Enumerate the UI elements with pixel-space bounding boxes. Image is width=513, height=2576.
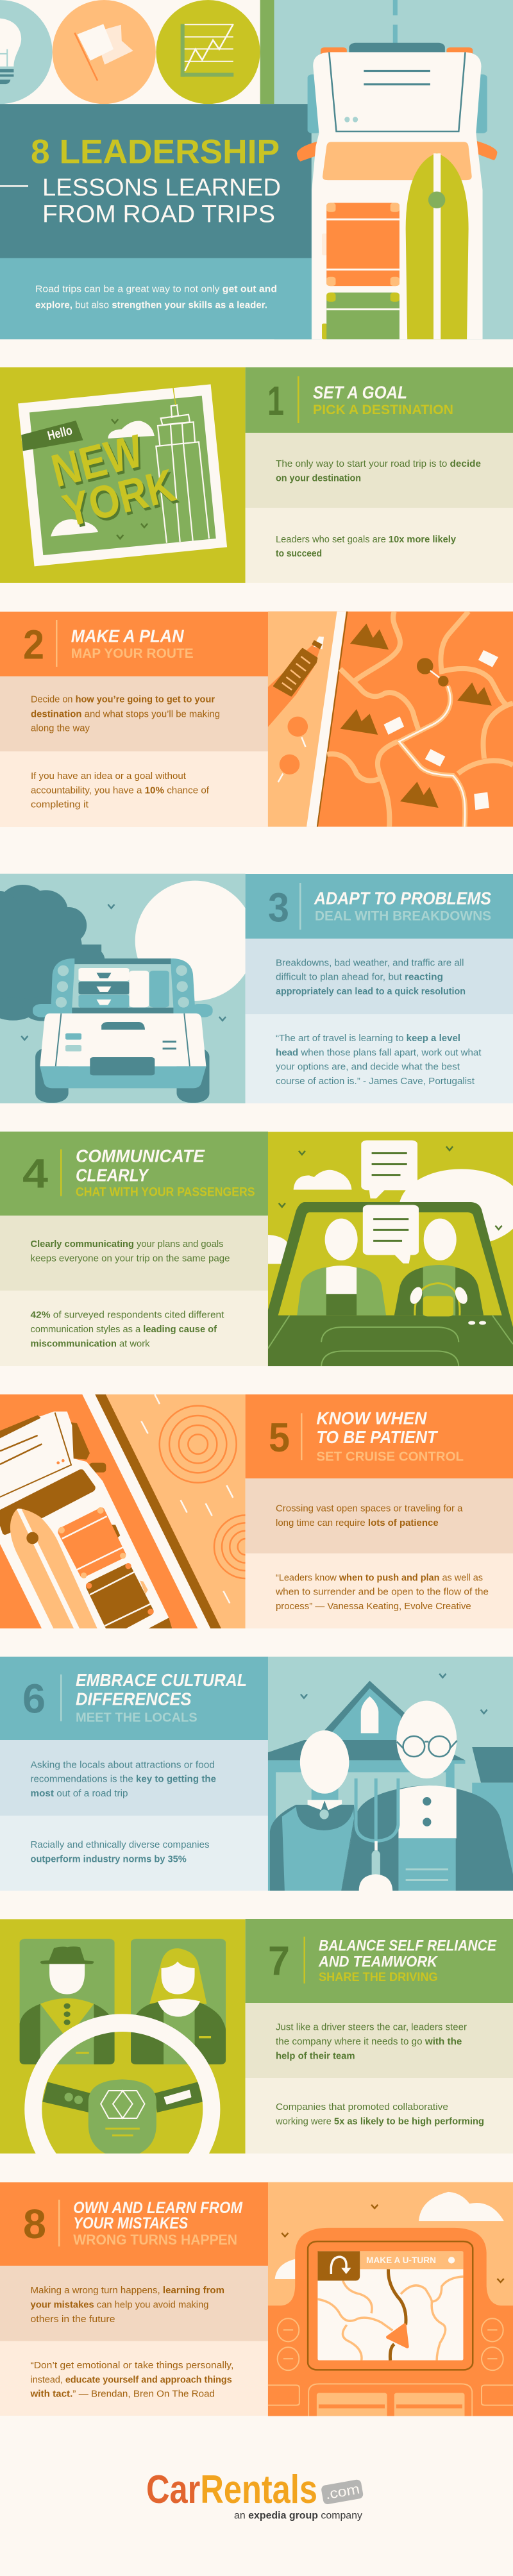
- header 2: 2: [23, 621, 44, 667]
- text block 4a: [0, 1216, 268, 1291]
- illustration: two people in a car: [268, 1132, 513, 1366]
- woman portrait: [131, 1939, 226, 2064]
- text block 5a: [246, 1478, 513, 1553]
- text block 4a: keeps everyone on your trip on the same page: [31, 1253, 230, 1264]
- title: LESSONS LEARNED: [42, 174, 281, 201]
- illustration: van seen from above: [297, 43, 498, 339]
- header 5: KNOW WHEN: [316, 1409, 427, 1428]
- panel: section 8 own and learn from your mistakes: [0, 2182, 513, 2418]
- text block 3b: course of action is.” - James Cave, Portugalist: [276, 1076, 475, 1087]
- text block 4b: 42% of surveyed respondents cited different: [31, 1310, 224, 1321]
- header 2: MAKE A PLAN: [71, 626, 185, 646]
- text block 3a: appropriately can lead to a quick resolution: [276, 986, 466, 997]
- farmhouse: [268, 1681, 513, 1891]
- panel: section 6 embrace cultural differences: [0, 1657, 513, 1891]
- text block 2b: accountability, you have a 10% chance of: [31, 785, 210, 796]
- illustration: New York postcard: NEW: [47, 425, 148, 498]
- text block 6a: Asking the locals about attractions or food: [31, 1759, 215, 1770]
- text block 6a: recommendations is the key to getting the: [31, 1774, 216, 1785]
- header 4: [0, 1132, 268, 1216]
- GPS instruction label: MAKE A U-TURN: [366, 2255, 436, 2265]
- text block 8b: instead, educate yourself and approach things: [31, 2374, 232, 2385]
- text block 7a: help of their team: [276, 2050, 355, 2061]
- text block 8a: [0, 2266, 268, 2341]
- header 6: MEET THE LOCALS: [76, 1710, 198, 1725]
- text block 2a: Decide on how you’re going to get to your: [31, 694, 215, 705]
- map roads: [327, 612, 513, 827]
- logo: CarRentals.com: an expedia group company: [234, 2511, 362, 2522]
- speech bubbles: [361, 1141, 419, 1264]
- pitchfork: [356, 1778, 398, 1891]
- header 3: ADAPT TO PROBLEMS: [314, 889, 492, 908]
- text block 2a: along the way: [31, 723, 90, 734]
- text block 1a: The only way to start your road trip is to decide: [276, 458, 481, 469]
- panel: section 2 make a plan: [0, 612, 513, 827]
- tree: [0, 885, 105, 1021]
- illustration: van driving on road: [0, 1394, 246, 1628]
- text block 3b: head when those plans fall apart, work out what: [276, 1047, 482, 1058]
- text block 7b: Companies that promoted collaborative: [276, 2102, 448, 2112]
- header 8: YOUR MISTAKES: [73, 2214, 189, 2232]
- panel: hero illustration: [0, 0, 513, 339]
- header 6: [0, 1657, 268, 1740]
- logo: CarRentals.com: .com: [324, 2480, 361, 2502]
- header 4: CLEARLY: [76, 1165, 149, 1185]
- text block 5b: [246, 1553, 513, 1628]
- text block 2a: [0, 676, 268, 751]
- text block 3a: [246, 939, 513, 1014]
- logo: CarRentals.com: CarRentals: [146, 2468, 317, 2512]
- text block 3b: [246, 1014, 513, 1103]
- header 1: 1: [267, 378, 284, 424]
- illustration: map and pen: [268, 612, 513, 827]
- illustration: New York postcard: YORK: [60, 462, 183, 540]
- passenger: [297, 1219, 386, 1316]
- illustration: GPS navigation screen: [268, 2182, 513, 2418]
- text block 8a: your mistakes can help you avoid making: [31, 2299, 209, 2310]
- title: [31, 133, 281, 228]
- van body: [0, 1412, 172, 1628]
- text block 4a: Clearly communicating your plans and goals: [31, 1239, 223, 1250]
- title panel background: [0, 104, 312, 339]
- text block 8b: “Don’t get emotional or take things personally,: [31, 2360, 233, 2371]
- text block 2b: [0, 751, 268, 827]
- header 1: [246, 367, 513, 433]
- header 3: DEAL WITH BREAKDOWNS: [315, 908, 491, 923]
- title: FROM ROAD TRIPS: [42, 201, 275, 228]
- intro text: Road trips can be a great way to not only get out and: [35, 283, 277, 294]
- text block 8a: Making a wrong turn happens, learning from: [31, 2285, 224, 2296]
- suitcase: orange: [322, 233, 327, 255]
- intro text: explore, but also strengthen your skills as a leader.: [35, 299, 267, 310]
- text block 2a: destination and what stops you’ll be making: [31, 708, 220, 719]
- illustration: New York postcard: [0, 367, 246, 583]
- header 5: [246, 1394, 513, 1478]
- illustration: New York postcard: NEW: [49, 428, 150, 500]
- intro text: [35, 283, 277, 310]
- suitcase: green: [322, 324, 327, 339]
- text block 8a: others in the future: [31, 2314, 115, 2325]
- text block 3a: Breakdowns, bad weather, and traffic are all: [276, 957, 464, 968]
- illustration: couple in front of farmhouse: [268, 1657, 513, 1891]
- panel: section 7 balance self reliance and teamwork: [0, 1919, 513, 2154]
- text block 1a: on your destination: [276, 473, 361, 483]
- map mountains: [341, 624, 492, 808]
- text block 3b: “The art of travel is learning to keep a level: [276, 1033, 460, 1044]
- text block 4b: miscommunication at work: [31, 1338, 150, 1349]
- illustration: New York postcard: YORK: [58, 460, 181, 537]
- suitcases: [58, 1507, 172, 1628]
- text block 6a: [0, 1740, 268, 1816]
- text block 3b: your options are, and decide what the best: [276, 1062, 460, 1073]
- car: [33, 958, 213, 1103]
- knobs: [268, 2318, 513, 2416]
- title: 8 LEADERSHIP: [31, 133, 280, 171]
- illustration: car with luggage: [0, 874, 255, 1103]
- text block 8b: with tact.” — Brendan, Bren On The Road: [29, 2388, 215, 2399]
- header 2: [0, 612, 268, 676]
- text block 6b: [0, 1816, 268, 1891]
- header 3: [246, 874, 513, 939]
- header 7: [246, 1919, 513, 2003]
- illustration: driver and passenger behind steering wheel: [0, 1919, 245, 2154]
- text block 6b: outperform industry norms by 35%: [31, 1853, 187, 1864]
- text block 7b: working were 5x as likely to be high performing: [275, 2116, 484, 2127]
- icon: line chart: [156, 0, 260, 104]
- header 8: OWN AND LEARN FROM: [73, 2199, 243, 2217]
- text block 7a: [246, 2003, 513, 2078]
- surfboard: [10, 1509, 97, 1628]
- header 8: WRONG TURNS HAPPEN: [73, 2232, 237, 2248]
- map roads: [317, 2277, 463, 2361]
- header 4: CHAT WITH YOUR PASSENGERS: [76, 1185, 255, 1199]
- header 1: PICK A DESTINATION: [313, 403, 453, 417]
- steering wheel: [24, 2014, 221, 2154]
- target rings: [158, 1405, 246, 1580]
- icon: light bulb: [0, 0, 53, 104]
- white line accent: [0, 185, 28, 187]
- text block 5b: “Leaders know when to push and plan as well as: [276, 1572, 483, 1583]
- farmer's wife: [270, 1730, 355, 1891]
- header 6: DIFFERENCES: [76, 1689, 192, 1709]
- surfboard: [406, 153, 469, 339]
- text block 3a: difficult to plan ahead for, but reacting: [276, 972, 443, 983]
- man portrait: [20, 1939, 115, 2064]
- icon: u-turn arrow: [331, 2257, 351, 2274]
- header 6: 6: [22, 1676, 46, 1722]
- text block 1b: to succeed: [276, 548, 322, 559]
- illustration: New York postcard: Hello: [46, 424, 74, 443]
- text block 1a: [246, 433, 513, 508]
- text block 2b: If you have an idea or a goal without: [31, 771, 187, 782]
- header 7: 7: [268, 1938, 290, 1984]
- header 5: SET CRUISE CONTROL: [316, 1450, 464, 1464]
- text block 6a: most out of a road trip: [31, 1788, 128, 1799]
- text block 7a: Just like a driver steers the car, leaders steer: [276, 2022, 467, 2033]
- header 8: [0, 2182, 268, 2266]
- header 2: MAP YOUR ROUTE: [71, 646, 194, 661]
- panel: section 5 know when to be patient: [0, 1394, 513, 1628]
- text block 7b: [246, 2078, 513, 2154]
- header 7: AND TEAMWORK: [318, 1953, 439, 1970]
- header 3: 3: [268, 884, 289, 930]
- driver: [394, 1219, 484, 1316]
- text block 1b: Leaders who set goals are 10x more likely: [276, 534, 457, 545]
- text block 2b: completing it: [31, 799, 89, 810]
- dashboard: [268, 1316, 513, 1366]
- icon: flag: [53, 0, 156, 104]
- header 1: SET A GOAL: [313, 383, 407, 403]
- panel: section 3 adapt to problems: [0, 874, 513, 1103]
- header 5: 5: [269, 1414, 290, 1460]
- text block 5b: when to surrender and be open to the flow of the: [275, 1587, 489, 1598]
- road background: [274, 0, 513, 339]
- text block 1b: [246, 508, 513, 583]
- panel: section 4 communicate clearly: [0, 1132, 513, 1366]
- text block 5a: long time can require lots of patience: [276, 1518, 439, 1528]
- text block 5b: process” — Vanessa Keating, Evolve Creative: [276, 1601, 471, 1612]
- text block 5a: Crossing vast open spaces or traveling for a: [276, 1503, 463, 1514]
- header 4: 4: [22, 1151, 48, 1197]
- icon: pen: [274, 637, 324, 696]
- panel: section 1 set a goal: [0, 367, 513, 583]
- map markers: [383, 650, 498, 810]
- header 7: SHARE THE DRIVING: [319, 1971, 438, 1984]
- text block 7a: the company where it needs to go with the: [276, 2036, 462, 2047]
- farmer: [341, 1701, 513, 1891]
- header 4: COMMUNICATE: [76, 1146, 206, 1166]
- text block 6b: Racially and ethnically diverse companies: [31, 1839, 209, 1850]
- header 6: EMBRACE CULTURAL: [76, 1670, 247, 1690]
- text block 4b: [0, 1291, 268, 1366]
- text block 4b: communication styles as a leading cause of: [31, 1324, 217, 1335]
- text block 8b: [0, 2341, 268, 2416]
- header 8: 8: [23, 2201, 46, 2247]
- header 5: TO BE PATIENT: [316, 1427, 438, 1447]
